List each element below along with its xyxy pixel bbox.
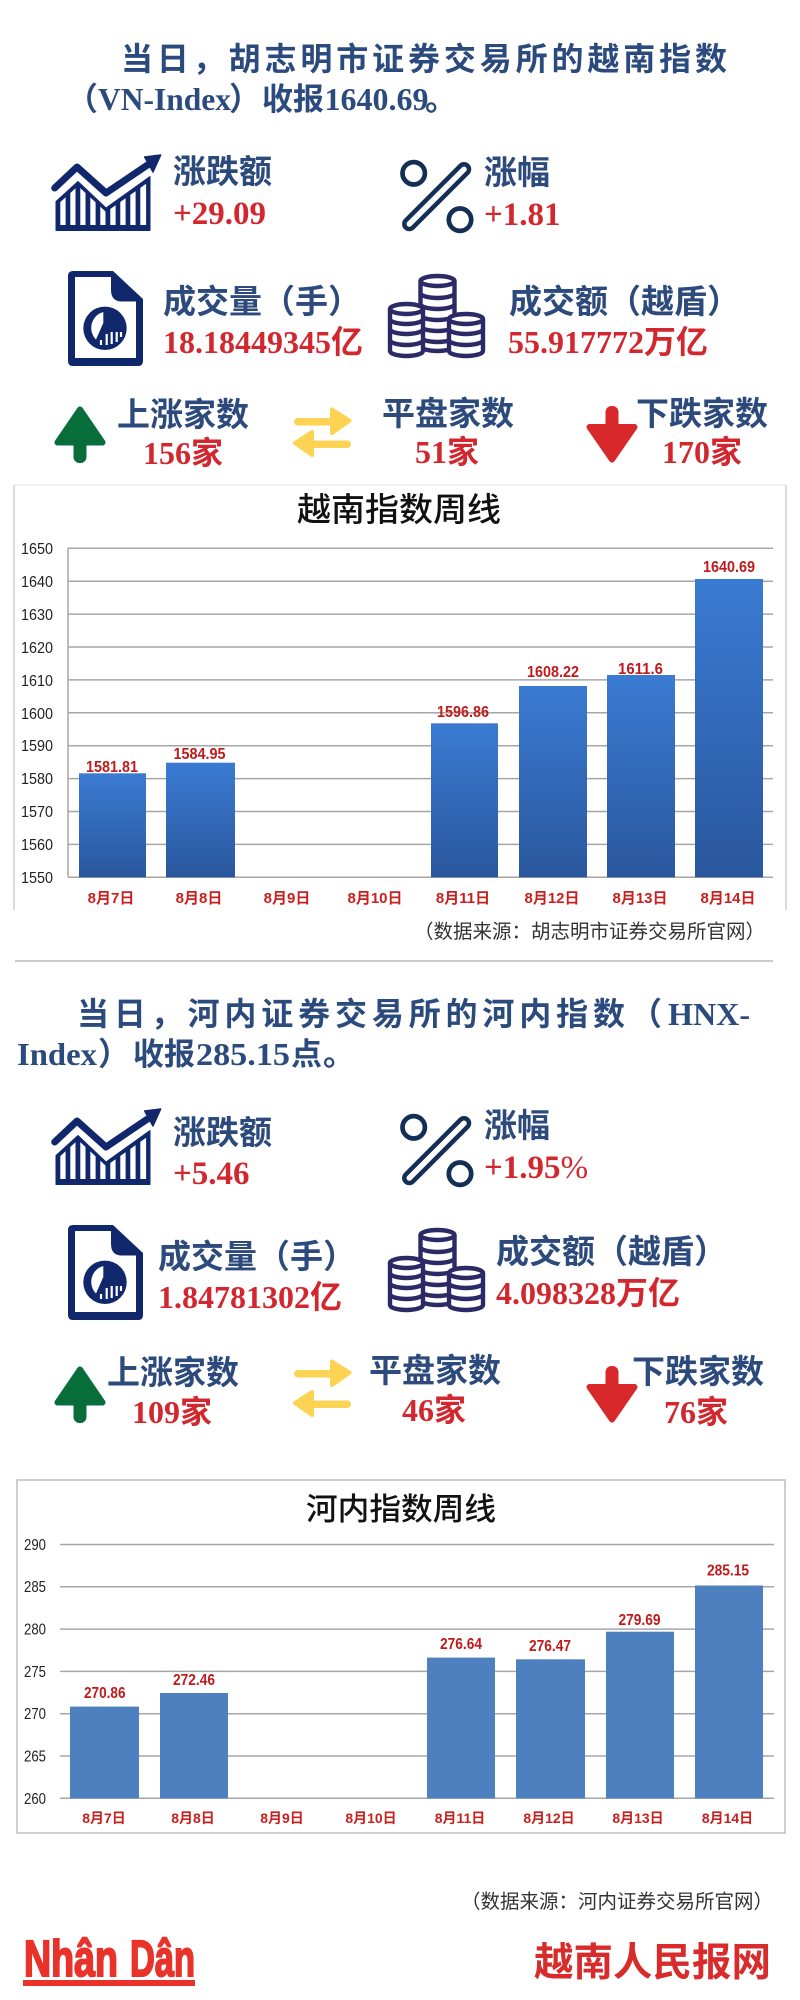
- x axis labels: 8月9日: [264, 890, 310, 907]
- data labels: 276.47: [529, 1638, 571, 1655]
- stat: declining stocks: 下跌家数: [636, 396, 768, 433]
- stat: change amount: +29.09: [173, 196, 266, 232]
- data labels: 279.69: [618, 1612, 661, 1629]
- data labels: [86, 559, 755, 776]
- y axis labels: 1590: [21, 738, 53, 755]
- heading: VN-Index close: （: [66, 81, 98, 117]
- stat: change percent: 涨幅: [484, 1108, 550, 1145]
- y axis labels: 1640: [21, 574, 53, 591]
- stat: unchanged stocks: [369, 1353, 501, 1428]
- stat: trading volume: 成交量（手）: [163, 284, 361, 321]
- stat: advancing stocks: 109家: [132, 1394, 212, 1430]
- x axis labels: 8月13日: [612, 890, 668, 907]
- chart title: 越南指数周线: [297, 491, 501, 528]
- heading: VN-Index close: ）: [229, 81, 261, 117]
- y axis labels: 1560: [21, 837, 53, 854]
- stat: declining stocks: [636, 396, 768, 470]
- logo: Nhan Dan: Nhân: [24, 1930, 118, 1987]
- y axis labels: 280: [24, 1622, 46, 1638]
- stat: trading value: [508, 284, 740, 360]
- x axis labels: 8月11日: [435, 1810, 485, 1826]
- stat: change amount: 涨跌额: [173, 154, 272, 191]
- data labels: 1640.69: [703, 559, 755, 576]
- stat: advancing stocks: [107, 1355, 239, 1430]
- heading: HNX-Index close: 285.15: [196, 1036, 290, 1072]
- stat: declining stocks: 170家: [662, 434, 742, 470]
- heading: VN-Index close: 收报: [262, 82, 324, 117]
- stat: trading volume: 1.84781302亿: [158, 1279, 342, 1315]
- heading: VN-Index close: 。: [425, 81, 457, 117]
- icon: document with pie: [68, 1225, 143, 1320]
- stat: trading volume: [158, 1239, 356, 1315]
- y axis labels: 1600: [21, 706, 53, 723]
- y axis labels: 1550: [21, 870, 53, 887]
- stat: change percent: [484, 1108, 588, 1186]
- y axis labels: 290: [24, 1537, 46, 1554]
- stat: unchanged stocks: 51家: [415, 434, 479, 470]
- stat: trading volume: [163, 284, 363, 360]
- stat: change amount: [173, 154, 272, 232]
- icon: coin stacks: [390, 276, 483, 356]
- chart title: 河内指数周线: [306, 1492, 496, 1527]
- icon: red down arrow: [590, 406, 634, 460]
- stat: advancing stocks: 156家: [143, 435, 223, 471]
- stat: change percent: 涨幅: [484, 155, 550, 192]
- icon: document with pie: [68, 271, 143, 366]
- stat: unchanged stocks: 46家: [402, 1392, 466, 1428]
- stat: unchanged stocks: 平盘家数: [369, 1353, 501, 1390]
- y axis labels: 1580: [21, 771, 53, 788]
- data labels: 276.64: [440, 1636, 482, 1653]
- logo: Nhan Dan: Dân: [130, 1930, 195, 1987]
- x axis labels: 8月10日: [347, 890, 403, 907]
- stat: change amount: +5.46: [173, 1156, 250, 1192]
- heading: HNX-Index close: Index: [17, 1036, 97, 1072]
- heading: HNX-Index close: HNX-: [668, 996, 750, 1032]
- stat: trading value: 成交额（越盾）: [496, 1234, 727, 1271]
- stat: advancing stocks: 上涨家数: [117, 397, 249, 434]
- y axis labels: 1610: [21, 673, 53, 690]
- data labels: [84, 1562, 749, 1702]
- icon: green up arrow: [58, 1370, 102, 1423]
- x axis labels: 8月9日: [260, 1810, 304, 1826]
- heading: HNX-Index close: （: [630, 996, 662, 1032]
- data labels: 1608.22: [527, 664, 579, 681]
- x axis labels: [88, 890, 756, 907]
- heading: HNX-Index close: 。: [323, 1036, 355, 1072]
- stat: declining stocks: 下跌家数: [632, 1354, 764, 1391]
- heading: VN-Index close: 1640.69: [324, 81, 428, 117]
- x axis labels: [82, 1810, 753, 1826]
- heading: HNX-Index close: 收报: [133, 1037, 195, 1072]
- heading: HNX-Index close: 当日，河内证券交易所的河内指数: [77, 996, 625, 1032]
- stat: change percent: [484, 155, 561, 233]
- stat: unchanged stocks: 平盘家数: [382, 396, 514, 433]
- x axis labels: 8月14日: [700, 890, 756, 907]
- bar chart: HNX-Index weekly: [17, 1480, 785, 1833]
- x axis labels: 8月10日: [345, 1810, 397, 1826]
- icon: yellow swap arrows: [294, 410, 351, 455]
- heading: VN-Index close: 当日，胡志明市证券交易所的越南指数: [121, 41, 727, 77]
- y axis labels: 260: [24, 1791, 46, 1808]
- y axis labels: 1630: [21, 607, 53, 624]
- y axis labels: 285: [24, 1579, 46, 1596]
- icon: trend chart: [55, 155, 161, 230]
- y axis labels: 275: [24, 1664, 46, 1681]
- bars: [70, 1586, 763, 1798]
- icon: percent: [402, 1116, 471, 1185]
- y axis labels: [24, 1537, 46, 1808]
- icon: green up arrow: [58, 410, 102, 463]
- x axis labels: 8月8日: [171, 1810, 215, 1826]
- icon: yellow swap arrows: [294, 1362, 351, 1415]
- stat: trading volume: 18.18449345亿: [163, 324, 363, 360]
- x axis labels: 8月7日: [88, 890, 134, 907]
- y axis labels: [21, 541, 53, 887]
- y axis labels: 265: [24, 1748, 46, 1766]
- stat: trading value: 55.917772万亿: [508, 324, 708, 360]
- stat: change amount: [173, 1115, 272, 1192]
- x axis labels: 8月11日: [436, 890, 490, 907]
- stat: change percent: +1.95%: [484, 1150, 588, 1186]
- icon: percent: [402, 162, 471, 231]
- bars: [79, 579, 763, 877]
- x axis labels: 8月8日: [176, 890, 222, 907]
- stat: change amount: 涨跌额: [173, 1115, 272, 1152]
- stat: trading value: 成交额（越盾）: [509, 284, 740, 321]
- panel: HNX-Index summary: [17, 996, 764, 1430]
- stat: trading value: 4.098328万亿: [496, 1275, 680, 1311]
- y axis labels: 1650: [21, 541, 53, 558]
- heading: HNX-Index close: ）: [98, 1036, 130, 1072]
- y axis labels: 1570: [21, 804, 53, 821]
- stat: declining stocks: [632, 1354, 764, 1430]
- icon: trend chart: [55, 1109, 161, 1184]
- data labels: 1584.95: [174, 746, 226, 763]
- stat: trading volume: 成交量（手）: [158, 1239, 356, 1276]
- x axis labels: 8月13日: [612, 1810, 664, 1826]
- source note: HNX: （数据来源：河内证券交易所官网）: [461, 1891, 773, 1913]
- panel: VN-Index summary: [55, 41, 768, 471]
- stat: unchanged stocks: [382, 396, 514, 470]
- x axis labels: 8月12日: [524, 890, 580, 907]
- data labels: 1581.81: [86, 759, 138, 776]
- heading: VN-Index close: [66, 41, 727, 117]
- icon: coin stacks: [390, 1230, 483, 1310]
- x axis labels: 8月12日: [523, 1810, 575, 1826]
- heading: HNX-Index close: 点: [291, 1037, 322, 1072]
- brand name: 越南人民报网: [534, 1941, 771, 1985]
- x axis labels: 8月7日: [82, 1810, 126, 1826]
- y axis labels: 270: [24, 1706, 46, 1723]
- x axis labels: 8月14日: [702, 1810, 753, 1826]
- data labels: 272.46: [173, 1672, 215, 1689]
- data labels: 1596.86: [437, 704, 489, 721]
- y axis labels: 1620: [21, 640, 53, 657]
- heading: VN-Index close: VN-Index: [98, 81, 231, 117]
- stat: change percent: +1.81: [484, 197, 561, 233]
- data labels: 270.86: [84, 1685, 126, 1702]
- icon: red down arrow: [590, 1366, 634, 1420]
- source note: HOSE: （数据来源：胡志明市证券交易所官网）: [414, 921, 765, 943]
- stat: trading value: [496, 1234, 727, 1311]
- bar chart: VN-Index weekly: [14, 485, 786, 910]
- data labels: 1611.6: [618, 661, 663, 678]
- data labels: 285.15: [707, 1562, 749, 1580]
- stat: declining stocks: 76家: [664, 1394, 728, 1430]
- heading: HNX-Index close: [17, 996, 750, 1072]
- stat: advancing stocks: 上涨家数: [107, 1355, 239, 1392]
- stat: advancing stocks: [117, 397, 249, 471]
